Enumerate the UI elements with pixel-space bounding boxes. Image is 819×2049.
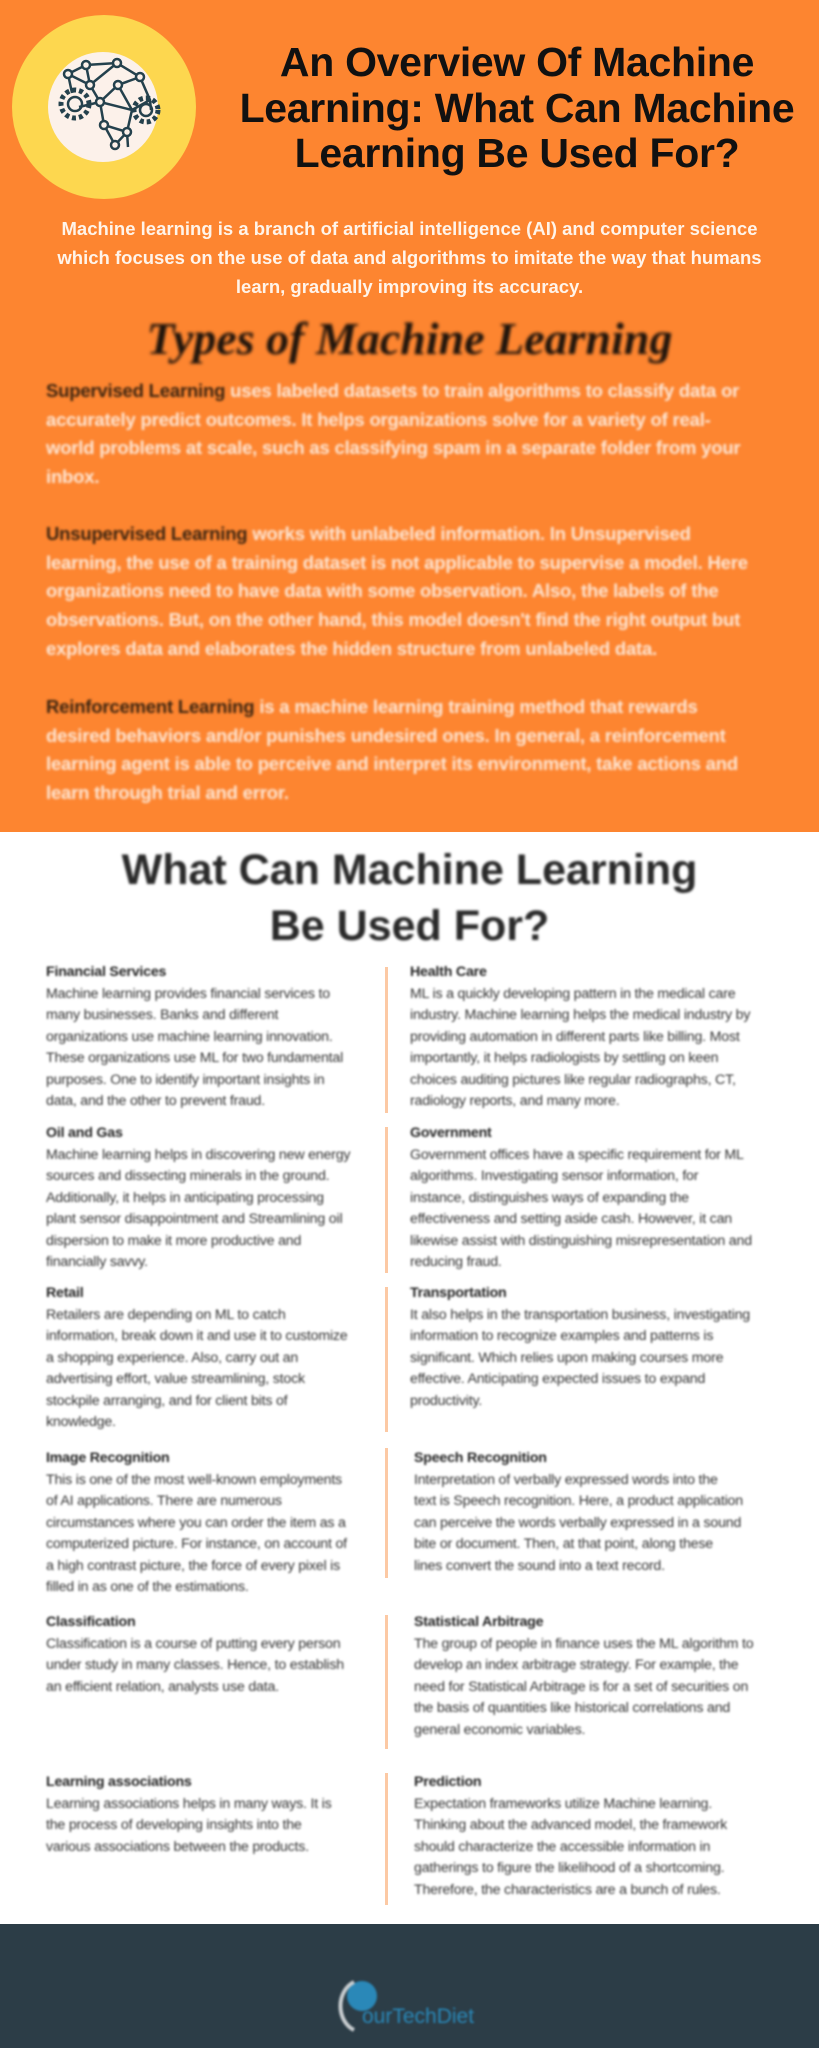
orange header panel (0, 0, 819, 832)
intro text: learn, gradually improving its accuracy. (236, 276, 583, 297)
paragraph: reinforcement: learn through trial and error. (46, 782, 289, 803)
heading: what can ML be used for: What Can Machine Learning (122, 846, 697, 894)
block: government: likewise assist with distinguishing misrepresentation and (410, 1232, 752, 1248)
block: image recognition: computerized picture. For instance, on account of (46, 1536, 347, 1552)
block: oil and gas (44, 1125, 352, 1270)
block: oil and gas: dispersion to make it more productive and (46, 1232, 301, 1248)
block: speech recognition: bite or document. Then, at that point, along these (414, 1536, 713, 1552)
footer (0, 1924, 819, 2048)
block: financial services: purposes. One to identify important insights in (46, 1072, 324, 1088)
block: health care: choices auditing pictures like regular radiographs, CT, (410, 1072, 736, 1088)
block: speech recognition: can perceive the words verbally expressed in a sound (414, 1514, 741, 1530)
heading: types of machine learning: Types of Machine Learning (146, 313, 672, 364)
block: learning associations: Learning associations (46, 1774, 192, 1790)
footer logo (337, 1979, 475, 2033)
block: government: Government offices have a specific requirement for ML (410, 1146, 744, 1162)
intro text: Machine learning is a branch of artificial intelligence (AI) and computer science (62, 218, 757, 239)
block: classification (45, 1614, 345, 1696)
block: transportation: effective. Anticipating expected issues to expand (410, 1371, 705, 1387)
block: transportation: Transportation (410, 1285, 507, 1301)
paragraph: unsupervised: organizations need to have data with some observation. Also, the labels of the (46, 580, 718, 601)
intro text (57, 218, 762, 297)
paragraph: unsupervised: observations. But, on the other hand, this model doesn't find the right output but (46, 609, 740, 630)
paragraph: reinforcement: Reinforcement Learning is a machine learning training method that rewards (46, 696, 698, 717)
block: government: reducing fraud. (410, 1254, 502, 1270)
block: image recognition: a high contrast picture, the force of every pixel is (46, 1558, 340, 1574)
block: learning associations: the process of developing insights into the (46, 1817, 302, 1833)
block: financial services: Machine learning provides financial services to (46, 986, 330, 1002)
block: financial services: many businesses. Banks and different (46, 1007, 278, 1023)
paragraph: reinforcement: desired behaviors and/or punishes undesired ones. In general, a reinforcement (46, 725, 726, 746)
block: government (409, 1125, 753, 1270)
block: classification: Classification is a course of putting every person (46, 1636, 340, 1652)
title: An Overview Of Machine (280, 39, 754, 85)
block: image recognition: of AI applications. There are numerous (46, 1493, 282, 1509)
block: health care (409, 964, 752, 1110)
block: prediction: Expectation frameworks utilize Machine learning. (414, 1796, 712, 1812)
block: retail: a shopping experience. Also, carry out an (46, 1350, 298, 1366)
block: retail: advertising effort, value streamlining, stock (46, 1371, 305, 1387)
block: speech recognition: Interpretation of verbally expressed words into the (414, 1472, 718, 1488)
block: health care: Health Care (410, 964, 487, 980)
block: government: algorithms. Investigating sensor information, for (410, 1168, 698, 1184)
block: financial services: These organizations use ML for two fundamental (46, 1050, 343, 1066)
block: government: effectiveness and setting aside cash. However, it can (410, 1211, 732, 1227)
block: statistical arbitrage (413, 1614, 755, 1738)
block: retail: Retailers are depending on ML to catch (46, 1306, 286, 1322)
block: retail (45, 1285, 348, 1430)
paragraph: reinforcement: learning agent is able to perceive and interpret its environment, take actions and (46, 753, 738, 774)
block: prediction: should characterize the accessible information in (414, 1838, 710, 1854)
icon: brain network logo (12, 15, 196, 199)
title (240, 39, 794, 176)
paragraph: supervised: inbox. (46, 466, 99, 487)
block: financial services: data, and the other to prevent fraud. (46, 1093, 265, 1109)
block: oil and gas: Oil and Gas (46, 1125, 123, 1141)
paragraph: supervised (44, 380, 742, 487)
block: retail: knowledge. (46, 1414, 116, 1430)
paragraph: supervised: Supervised Learning uses labeled datasets to train algorithms to classify data or (46, 380, 739, 401)
block: prediction: Therefore, the characteristics are a bunch of rules. (414, 1882, 721, 1898)
paragraph: unsupervised (45, 523, 749, 661)
block: statistical arbitrage: the basis of quantities like historical correlations and (414, 1700, 730, 1716)
block: statistical arbitrage: need for Statistical Arbitrage is for a set of securities on (414, 1678, 748, 1694)
block: learning associations: Learning associations helps in many ways. It is (46, 1796, 332, 1812)
block: classification: under study in many classes. Hence, to establish (46, 1657, 344, 1673)
block: oil and gas: plant sensor disappointment and Streamlining oil (46, 1211, 342, 1227)
block: retail: Retail (46, 1285, 83, 1301)
block: health care: ML is a quickly developing pattern in the medical care (410, 986, 735, 1002)
block: financial services: organizations use machine learning innovation. (46, 1028, 333, 1044)
block: health care: providing automation in different parts like billing. Most (410, 1028, 740, 1044)
paragraph: unsupervised: learning, the use of a training dataset is not applicable to supervise a model. Here (46, 552, 748, 573)
block: image recognition (45, 1450, 348, 1595)
paragraph: unsupervised: explores data and elaborates the hidden structure from unlabeled data. (46, 638, 657, 659)
block: health care: radiology reports, and many more. (410, 1093, 619, 1109)
block: oil and gas: sources and dissecting minerals in the ground. (46, 1168, 329, 1184)
heading: what can ML be used for (120, 846, 697, 950)
block: image recognition: Image Recognition (46, 1450, 170, 1466)
block: government: instance, distinguishes ways of expanding the (410, 1190, 689, 1206)
block: prediction: Thinking about the advanced model, the framework (414, 1817, 727, 1833)
block: transportation: It also helps in the transportation business, investigating (410, 1306, 750, 1322)
block: learning associations: various associations between the products. (46, 1838, 309, 1854)
block: image recognition: filled in as one of the estimations. (46, 1579, 249, 1595)
block: speech recognition (413, 1450, 744, 1574)
paragraph: reinforcement (45, 696, 739, 805)
block: health care: industry. Machine learning helps the medical industry by (410, 1007, 750, 1023)
block: statistical arbitrage: general economic variables. (414, 1722, 585, 1738)
block: government: Government (410, 1125, 492, 1141)
block: statistical arbitrage: Statistical Arbitrage (414, 1614, 543, 1630)
title: Learning Be Used For? (295, 130, 739, 176)
block: prediction (413, 1774, 728, 1898)
title: Learning: What Can Machine (240, 84, 794, 130)
block: transportation (408, 1285, 751, 1410)
block: prediction: gatherings to figure the likelihood of a shortcoming. (414, 1860, 724, 1876)
block: speech recognition: Speech Recognition (414, 1450, 547, 1466)
heading: what can ML be used for: Be Used For? (270, 902, 549, 950)
block: health care: importantly, it helps radiologists by settling on keen (410, 1050, 718, 1066)
block: image recognition: This is one of the most well-known employments (46, 1472, 342, 1488)
paragraph: supervised: accurately predict outcomes. It helps organizations solve for a variety of real- (46, 409, 711, 430)
block: oil and gas: Machine learning helps in discovering new energy (46, 1146, 350, 1162)
block: prediction: Prediction (414, 1774, 481, 1790)
block: classification: Classification (46, 1614, 135, 1630)
paragraph: supervised: world problems at scale, such as classifying spam in a separate folder from your (46, 437, 740, 458)
block: learning associations (44, 1774, 333, 1856)
paragraph: unsupervised: Unsupervised Learning works with unlabeled information. In Unsupervised (46, 523, 691, 544)
block: retail: information, break down it and use it to customize (46, 1328, 348, 1344)
block: retail: stockpile arranging, and for client bits of (46, 1392, 287, 1408)
block: speech recognition: lines convert the sound into a text record. (414, 1558, 665, 1574)
footer logo: ourTechDiet (362, 2005, 474, 2028)
block: statistical arbitrage: The group of people in finance uses the ML algorithm to (414, 1636, 753, 1652)
block: transportation: productivity. (410, 1392, 482, 1408)
block: classification: an efficient relation, analysts use data. (46, 1678, 279, 1694)
block: transportation: information to recognize examples and patterns is (410, 1328, 713, 1344)
block: statistical arbitrage: develop an index arbitrage strategy. For example, the (414, 1657, 738, 1673)
block: speech recognition: text is Speech recognition. Here, a product application (414, 1493, 743, 1509)
block: financial services (45, 964, 344, 1110)
intro text: which focuses on the use of data and algorithms to imitate the way that humans (57, 247, 762, 268)
block: oil and gas: financially savvy. (46, 1254, 148, 1270)
block: financial services: Financial Services (46, 964, 166, 980)
block: transportation: significant. Which relies upon making courses more (410, 1350, 723, 1366)
block: image recognition: circumstances where you can order the item as a (46, 1514, 346, 1530)
block: oil and gas: Additionally, it helps in anticipating processing (46, 1190, 324, 1206)
